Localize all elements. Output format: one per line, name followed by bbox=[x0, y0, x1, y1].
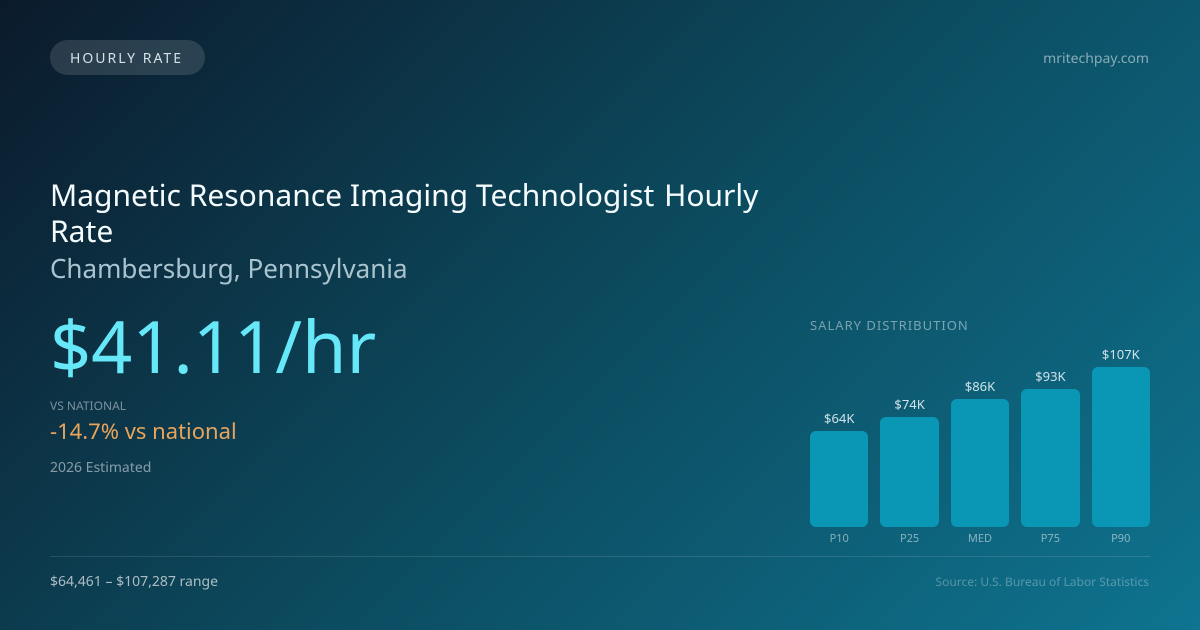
bar group: median bbox=[951, 377, 1009, 546]
site url: mritechpay.com bbox=[1043, 49, 1149, 68]
title: Rate bbox=[50, 210, 113, 251]
badge: hourly rate: HOURLY RATE bbox=[70, 49, 183, 68]
title bbox=[50, 174, 758, 251]
label: vs national: VS NATIONAL bbox=[50, 397, 126, 414]
bar group: P75: $93K bbox=[1035, 367, 1066, 385]
subtitle: location: Chambersburg, Pennsylvania bbox=[50, 250, 408, 286]
estimate note: 2026 Estimated bbox=[50, 458, 151, 477]
bar group: P10: P10 bbox=[830, 531, 849, 546]
main hourly rate: $41.11/hr bbox=[50, 297, 376, 395]
panel: salary distribution chart bbox=[810, 316, 1150, 546]
bar group: P90 bbox=[1092, 345, 1150, 546]
bar group: P90: P90 bbox=[1111, 531, 1130, 546]
salary range: $64,461 – $107,287 range bbox=[50, 572, 218, 591]
bar group: P75: P75 bbox=[1041, 531, 1060, 546]
bar group: P10 bbox=[810, 409, 868, 546]
comparison value: -14.7% vs national bbox=[50, 416, 237, 446]
bar group: P75 bbox=[1021, 367, 1080, 546]
chart heading: SALARY DISTRIBUTION bbox=[810, 316, 969, 334]
bar group: median: MED bbox=[968, 531, 992, 546]
bar group: P25 bbox=[880, 395, 939, 546]
bar group: P10: $64K bbox=[824, 409, 854, 427]
bar group: P25: P25 bbox=[900, 531, 919, 546]
bar group: P90: $107K bbox=[1102, 345, 1140, 363]
bar group: P25: $74K bbox=[894, 395, 925, 413]
title: Magnetic Resonance Imaging Technologist Hourly bbox=[50, 174, 758, 215]
badge: hourly rate bbox=[50, 40, 205, 75]
bar group: median: $86K bbox=[965, 377, 995, 395]
source note: Source: U.S. Bureau of Labor Statistics bbox=[936, 573, 1149, 590]
